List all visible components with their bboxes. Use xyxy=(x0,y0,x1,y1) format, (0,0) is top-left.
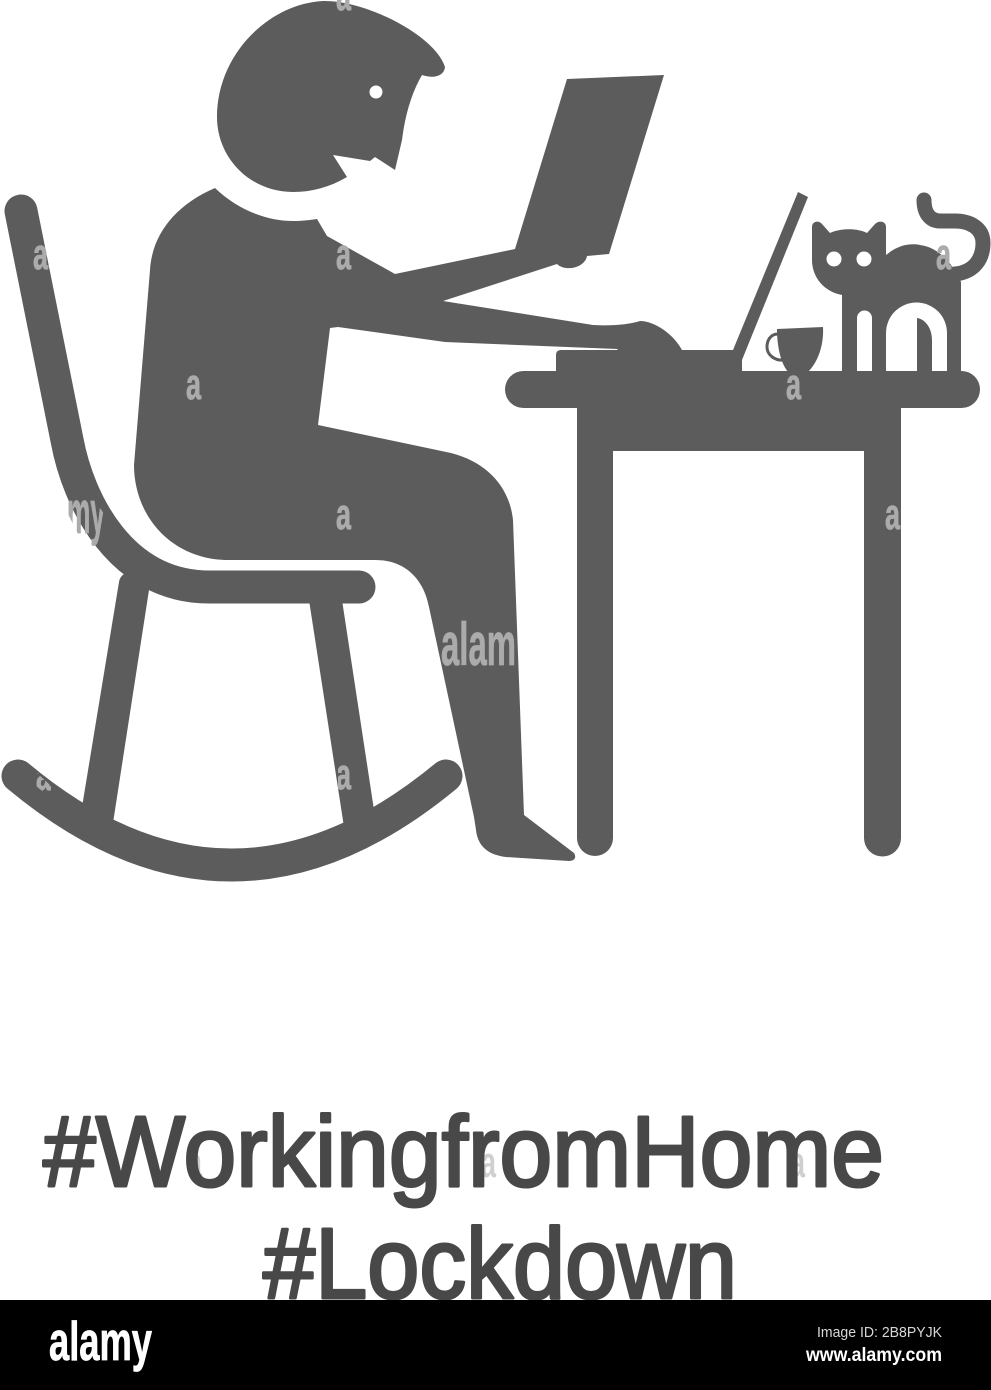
website: www.alamy.com xyxy=(805,1345,942,1366)
hashtag text xyxy=(43,1096,884,1320)
icon: eye xyxy=(370,86,382,98)
watermark fragments: a xyxy=(336,750,351,799)
icon: cat xyxy=(812,200,983,372)
watermark fragments: a xyxy=(336,490,351,539)
watermark fragments: alam xyxy=(441,611,516,678)
icon: rocking chair xyxy=(18,211,446,865)
heading: WorkingfromHome: #WorkingfromHome xyxy=(43,1096,884,1208)
watermark fragments: a xyxy=(36,751,51,800)
watermark fragments: a xyxy=(885,490,900,539)
icon: laptop xyxy=(556,192,808,372)
footer logo: alamy xyxy=(49,1310,152,1372)
icon: desk xyxy=(505,371,980,856)
icon: coffee cup xyxy=(767,327,823,372)
heading: Lockdown: #Lockdown xyxy=(263,1208,737,1320)
watermark fragments behind hashtags: a xyxy=(790,1138,805,1187)
icon: person body and arms xyxy=(134,188,683,861)
watermark fragments behind hashtags: a xyxy=(187,1138,202,1187)
icon: person head xyxy=(217,1,445,192)
watermark fragments: a xyxy=(336,230,351,279)
icon: tablet held by the person xyxy=(515,75,664,268)
pictogram: person working at a desk xyxy=(18,1,983,865)
image id: Image ID: 2B8PYJK xyxy=(817,1324,942,1341)
watermark fragments behind hashtags xyxy=(187,1138,805,1187)
footer bar xyxy=(0,1300,991,1390)
watermark fragments xyxy=(33,0,951,800)
watermark fragments: a xyxy=(786,360,801,409)
watermark fragments: a xyxy=(186,360,201,409)
watermark fragments behind hashtags: a xyxy=(481,1138,496,1187)
watermark fragments: a xyxy=(936,230,951,279)
watermark fragments: my xyxy=(67,479,105,546)
watermark fragments: a xyxy=(33,230,48,279)
